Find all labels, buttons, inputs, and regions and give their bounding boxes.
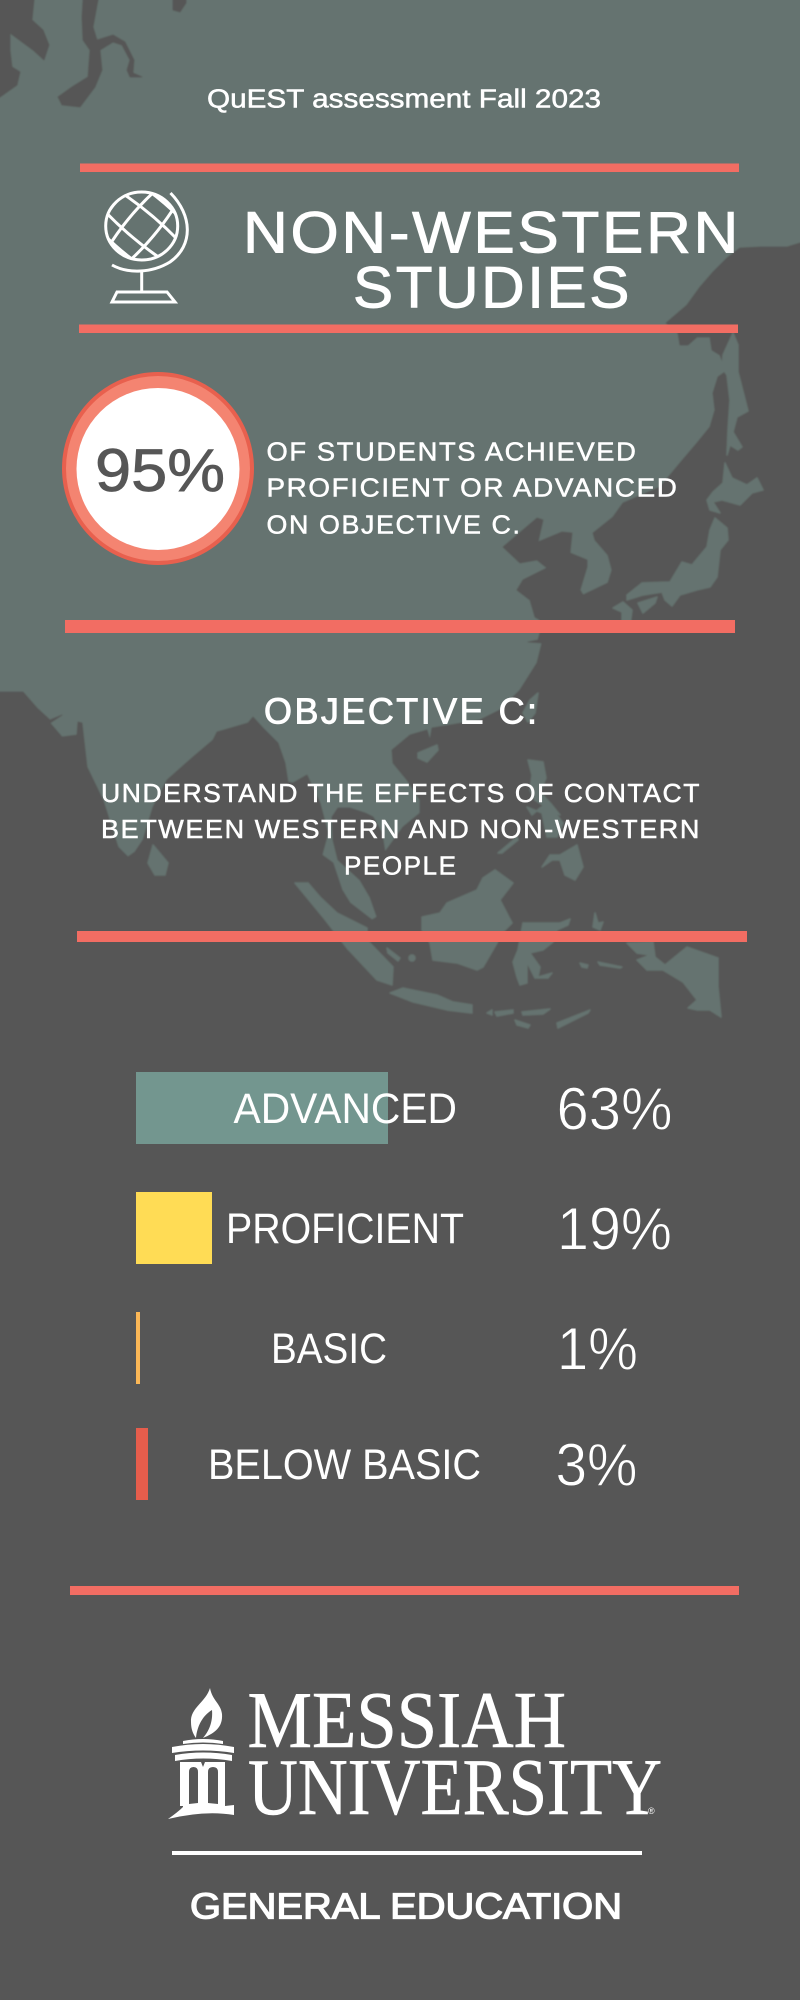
icon: globe on stand [104,190,189,304]
logo rule [172,1851,642,1855]
title: Non-Western Studies [243,200,741,320]
objective description: BETWEEN WESTERN AND NON-WESTERN [101,816,701,844]
text: General Education: GENERAL EDUCATION [190,1886,622,1926]
row: Basic 1% [136,1312,638,1384]
icon: flame and pillar [168,1688,234,1819]
title: Non-Western Studies: NON-WESTERN [243,200,741,266]
row: Advanced 63% [136,1072,672,1144]
chart: achievement levels [136,1072,672,1500]
divider bottom [70,1586,739,1595]
divider lower [77,931,747,942]
stat description: ON OBJECTIVE C. [266,512,522,540]
row: Basic 1%: 1% [557,1316,638,1382]
row: Proficient 19% [136,1192,672,1264]
stat description [266,438,678,540]
divider top [80,164,739,172]
islands [722,333,748,455]
heading: Objective C: OBJECTIVE C: [264,690,540,732]
divider under title [79,324,738,333]
row: Below Basic 3%: BELOW BASIC [208,1441,481,1489]
row: Basic 1%: BASIC [271,1325,387,1373]
logo: Messiah University: MESSIAH [248,1677,566,1765]
logo: Messiah University: UNIVERSITY [248,1744,662,1832]
logo: Messiah University [168,1677,662,1832]
top-left water [0,0,49,105]
row: Below Basic 3% [136,1428,638,1500]
row: Proficient 19%: PROFICIENT [226,1205,464,1253]
row: Advanced 63%: ADVANCED [234,1085,457,1133]
stat circle: 95%: 95% [95,437,225,504]
row: Advanced 63%: 63% [556,1076,672,1142]
stat description: OF STUDENTS ACHIEVED [266,438,638,466]
stat circle: 95% [62,372,254,565]
title: Non-Western Studies: STUDIES [353,256,632,320]
subtitle: QuEST assessment Fall 2023: QuEST assessment Fall 2023 [207,86,601,114]
objective description [101,780,701,880]
objective description: PEOPLE [344,852,458,880]
row: Proficient 19%: 19% [557,1196,672,1262]
divider mid [65,620,735,633]
row: Below Basic 3%: 3% [556,1432,638,1498]
objective description: UNDERSTAND THE EFFECTS OF CONTACT [101,780,701,808]
stat description: PROFICIENT OR ADVANCED [266,474,678,502]
logo: Messiah University: ® [648,1806,655,1816]
